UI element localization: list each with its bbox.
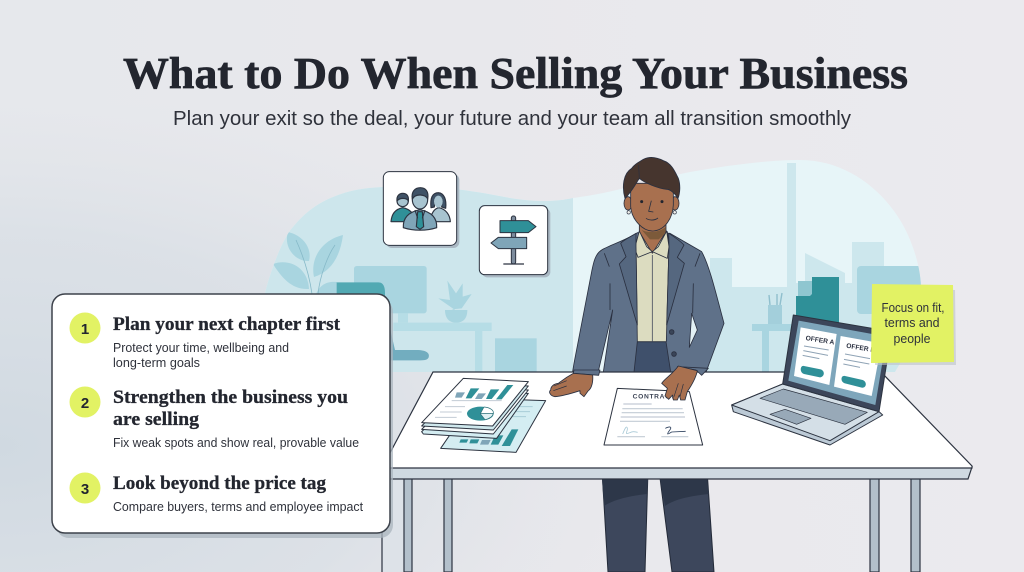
box [495, 338, 537, 375]
trousers top [634, 342, 671, 372]
step 1: 1 [81, 321, 89, 338]
neck [639, 218, 666, 253]
step 3 [70, 472, 364, 514]
buttons [669, 330, 674, 334]
cuffs [573, 370, 600, 375]
ears [624, 197, 632, 210]
step 2 [70, 386, 359, 450]
step 3: Compare buyers, terms and employee impact [113, 500, 364, 514]
title: What to Do When Selling Your Business [123, 49, 908, 98]
step 2: Strengthen the business you [113, 387, 348, 408]
desk [393, 323, 492, 373]
shirt [636, 232, 669, 342]
step 3: Look beyond the price tag [113, 473, 326, 494]
left person [391, 208, 416, 222]
lapels [619, 233, 637, 325]
face [631, 183, 673, 231]
right desk, monitor and folders [752, 266, 927, 375]
sticky note [871, 284, 956, 365]
subtitle: Plan your exit so the deal, your future and your team all transition smoothly [173, 108, 851, 130]
hands [550, 366, 708, 400]
laptop [732, 315, 892, 445]
person: legs [602, 470, 714, 572]
sticky note: terms and [884, 316, 940, 330]
desk [382, 372, 972, 572]
center person [403, 210, 437, 230]
stacked sheets [422, 393, 528, 438]
step 2: Fix weak spots and show real, provable value [113, 436, 359, 450]
right person [430, 208, 450, 222]
jacket [573, 233, 724, 377]
hair [623, 157, 680, 198]
contract label: CONTRACT [633, 393, 675, 400]
step 1: Protect your time, wellbeing and [113, 341, 289, 355]
icon card: signpost [479, 206, 550, 277]
icon card: team [383, 172, 459, 248]
arm gap [689, 313, 697, 347]
person: upper body [573, 157, 724, 377]
lid [783, 315, 892, 412]
step 1 [70, 312, 341, 370]
offer A [794, 327, 837, 385]
sticky note: Focus on fit, [882, 301, 944, 315]
right hand [662, 366, 697, 400]
base [732, 384, 883, 445]
chair [336, 282, 385, 296]
top sheet [422, 378, 528, 426]
offer B: OFFER B [846, 343, 876, 354]
left plant [273, 232, 343, 294]
pie [467, 407, 494, 421]
back sheet [441, 398, 546, 452]
potted plant [438, 281, 472, 323]
collar [635, 231, 652, 257]
offer B [834, 336, 882, 396]
left office in zoom coordinates [337, 266, 537, 375]
offer A: OFFER A [805, 335, 835, 347]
step 1: long-term goals [113, 356, 200, 370]
left hand [550, 373, 593, 397]
city skyline and window [707, 163, 900, 372]
step 3: 3 [81, 481, 89, 498]
step 1: Plan your next chapter first [113, 314, 341, 335]
monitor [354, 266, 427, 313]
step 2: 2 [81, 395, 89, 412]
contract [604, 388, 703, 445]
step 2: are selling [113, 409, 200, 430]
sticky note: people [894, 332, 931, 346]
backdrop: office scene [265, 160, 921, 372]
report stack [422, 378, 546, 452]
numbered steps card [52, 294, 393, 538]
features [640, 200, 643, 203]
